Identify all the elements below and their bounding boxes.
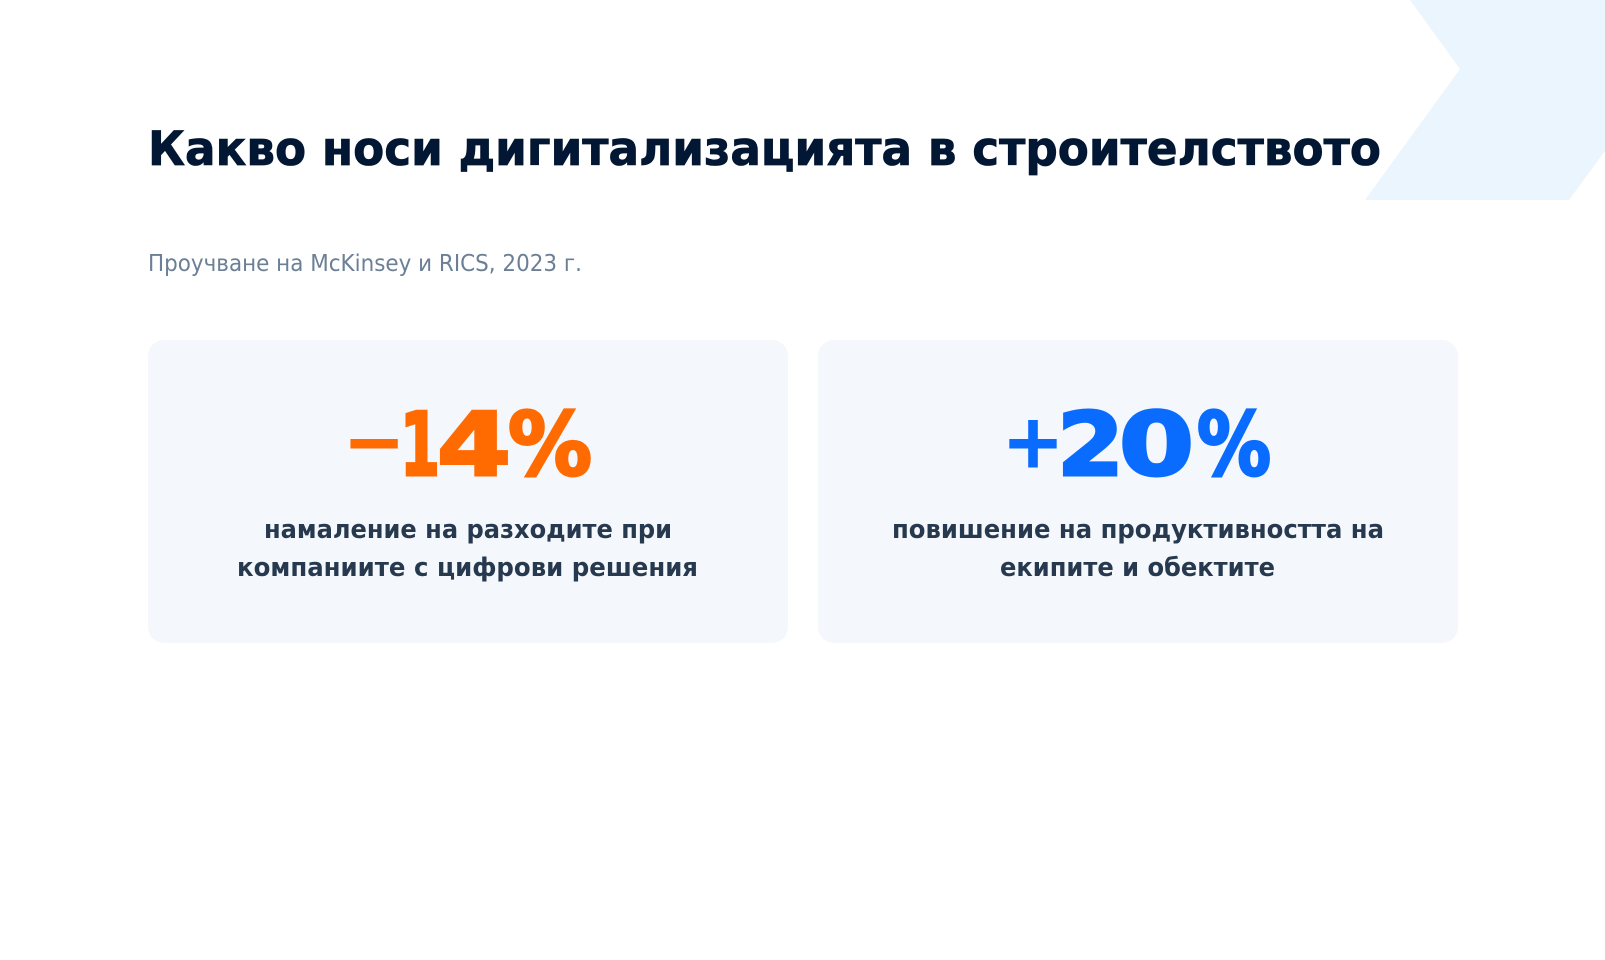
statistic: +20%: 2 xyxy=(1057,394,1124,496)
statistic: -14%: 1 xyxy=(400,394,440,496)
statistic: +20%: 0 xyxy=(1119,394,1194,496)
card background xyxy=(818,340,1458,643)
panel: cost reduction xyxy=(148,340,788,643)
card background xyxy=(148,340,788,643)
panel: productivity increase xyxy=(818,340,1458,643)
description: productivity increase: екипите и обектите xyxy=(1000,553,1275,583)
description: cost reduction: компаниите с цифрови решения xyxy=(237,553,698,583)
decorative chevron shape xyxy=(1365,0,1605,200)
statistic: +20%: % xyxy=(1197,394,1271,496)
statistic: +20%: + xyxy=(1002,399,1064,485)
description: productivity increase xyxy=(892,515,1384,583)
statistic: -14%: − xyxy=(343,399,405,485)
statistic: -14% xyxy=(343,394,592,496)
statistic: +20% xyxy=(1002,394,1271,496)
description: cost reduction: намаление на разходите при xyxy=(264,515,672,545)
statistic: -14%: % xyxy=(508,394,592,496)
statistic: -14%: 4 xyxy=(437,394,511,496)
description: cost reduction xyxy=(237,515,698,583)
title: Какво носи дигитализацията в строителството xyxy=(148,122,1381,177)
subtitle: Проучване на McKinsey и RICS, 2023 г. xyxy=(148,251,582,277)
description: productivity increase: повишение на продуктивността на xyxy=(892,515,1384,545)
